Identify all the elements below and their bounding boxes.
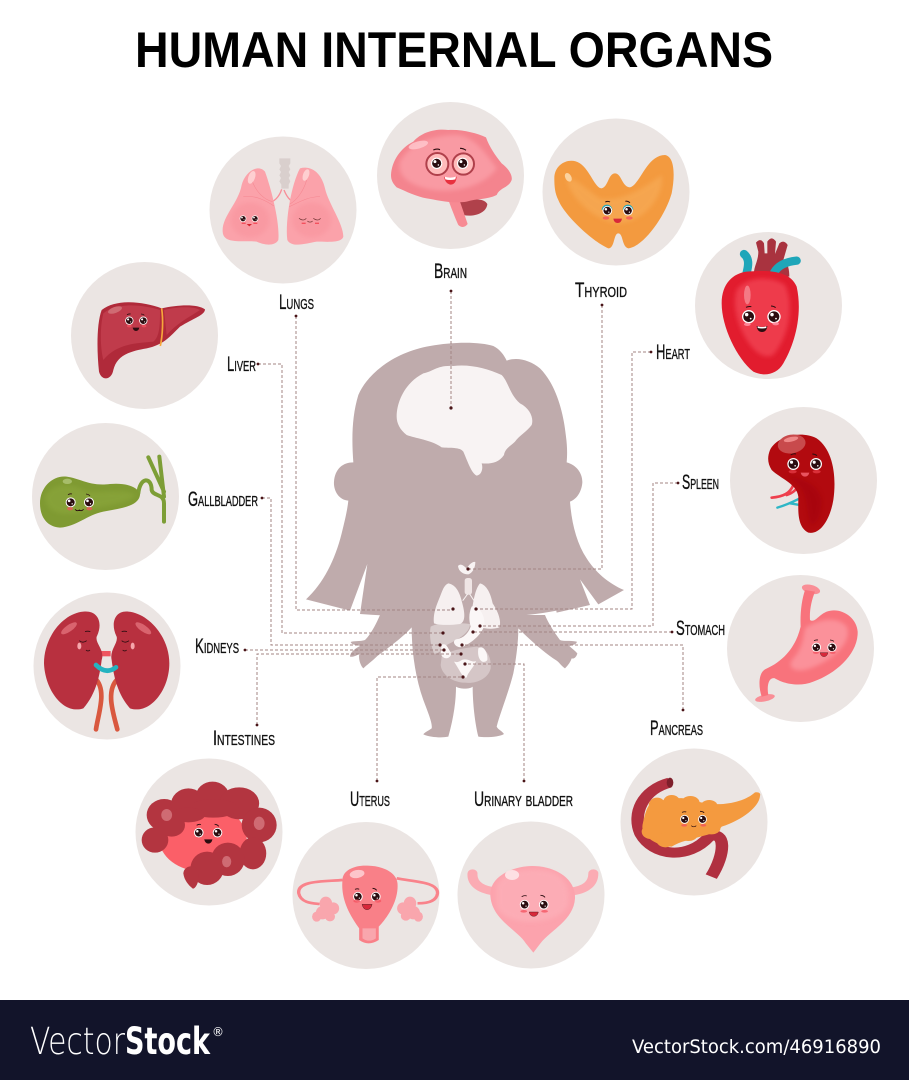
panel: spleen — [730, 407, 877, 554]
mini liver — [430, 623, 470, 654]
label: spleen: Spleen — [682, 471, 719, 494]
panel: pancreas — [620, 748, 768, 896]
label: stomach: Stomach — [676, 617, 725, 640]
labels — [188, 260, 725, 811]
line: uterus — [377, 677, 463, 781]
footer logo: Vector — [30, 1020, 126, 1063]
panel: liver — [71, 262, 218, 409]
label: heart: Heart — [656, 341, 690, 364]
icon: urinary bladder — [472, 866, 593, 953]
mini stomach and spleen — [454, 606, 484, 647]
panel: kidneys — [34, 592, 180, 740]
label: intestines: Intestines — [213, 727, 275, 750]
mini gallbladder and kidney — [441, 644, 487, 662]
label: brain: Brain — [434, 260, 467, 283]
line: spleen — [480, 483, 678, 626]
icon: heart — [722, 238, 799, 374]
label: uterus: Uterus — [350, 788, 390, 811]
line: kidneys — [245, 649, 444, 651]
line: stomach — [473, 631, 672, 633]
line: pancreas — [462, 645, 683, 710]
panel: gallbladder — [32, 423, 179, 570]
line: urinary bladder — [465, 664, 524, 781]
icon: thyroid — [554, 155, 674, 248]
line: lungs — [296, 316, 453, 610]
torso, arms and legs — [350, 615, 577, 737]
connector dots — [244, 290, 684, 782]
line: thyroid — [468, 305, 602, 569]
line: gallbladder — [262, 498, 440, 645]
label: kidneys: Kidneys — [195, 635, 239, 658]
mini right lung — [470, 583, 500, 629]
label: gallbladder: Gallbladder — [188, 488, 258, 511]
icon: lungs — [223, 158, 343, 245]
mini uterus — [454, 659, 476, 678]
line: liver — [258, 364, 443, 633]
mini thyroid — [458, 562, 475, 574]
icon: intestines — [142, 782, 277, 889]
icon: uterus — [299, 866, 438, 943]
icon: liver — [97, 302, 205, 378]
panel: brain — [377, 102, 524, 249]
icon: kidneys — [44, 612, 169, 729]
label: urinary bladder: Urinary bladder — [474, 788, 573, 811]
panel: heart — [695, 232, 842, 379]
brain shape — [397, 366, 532, 476]
icon: brain — [391, 130, 512, 227]
icon: gallbladder — [40, 457, 164, 528]
label: lungs: Lungs — [279, 291, 314, 314]
panel: thyroid — [542, 118, 690, 266]
footer bar — [0, 1000, 909, 1080]
icon: stomach — [755, 583, 858, 703]
footer url: VectorStock.com/46916890 — [632, 1036, 881, 1058]
panel: stomach — [727, 575, 874, 722]
hair and head — [306, 343, 624, 617]
mini left lung — [434, 583, 464, 625]
line: brain — [450, 291, 452, 408]
mini internal organs — [430, 562, 500, 683]
panel: urinary bladder — [458, 822, 604, 968]
title: HUMAN INTERNAL ORGANS — [135, 22, 773, 78]
connector lines — [244, 290, 684, 782]
icon: pancreas — [638, 778, 760, 877]
panel: lungs — [210, 136, 356, 284]
mini trachea — [465, 578, 472, 595]
line: intestines — [257, 654, 461, 725]
panel: intestines — [136, 758, 282, 906]
label: pancreas: Pancreas — [650, 717, 703, 740]
footer logo: ® — [212, 1025, 224, 1039]
body silhouette — [306, 343, 624, 737]
label: thyroid: Thyroid — [575, 279, 627, 302]
line: heart — [476, 352, 651, 609]
footer logo: Stock — [125, 1020, 211, 1063]
label: liver: Liver — [227, 353, 256, 376]
panel: uterus — [292, 822, 440, 969]
icon: spleen — [768, 432, 834, 533]
mini intestines — [441, 647, 491, 683]
